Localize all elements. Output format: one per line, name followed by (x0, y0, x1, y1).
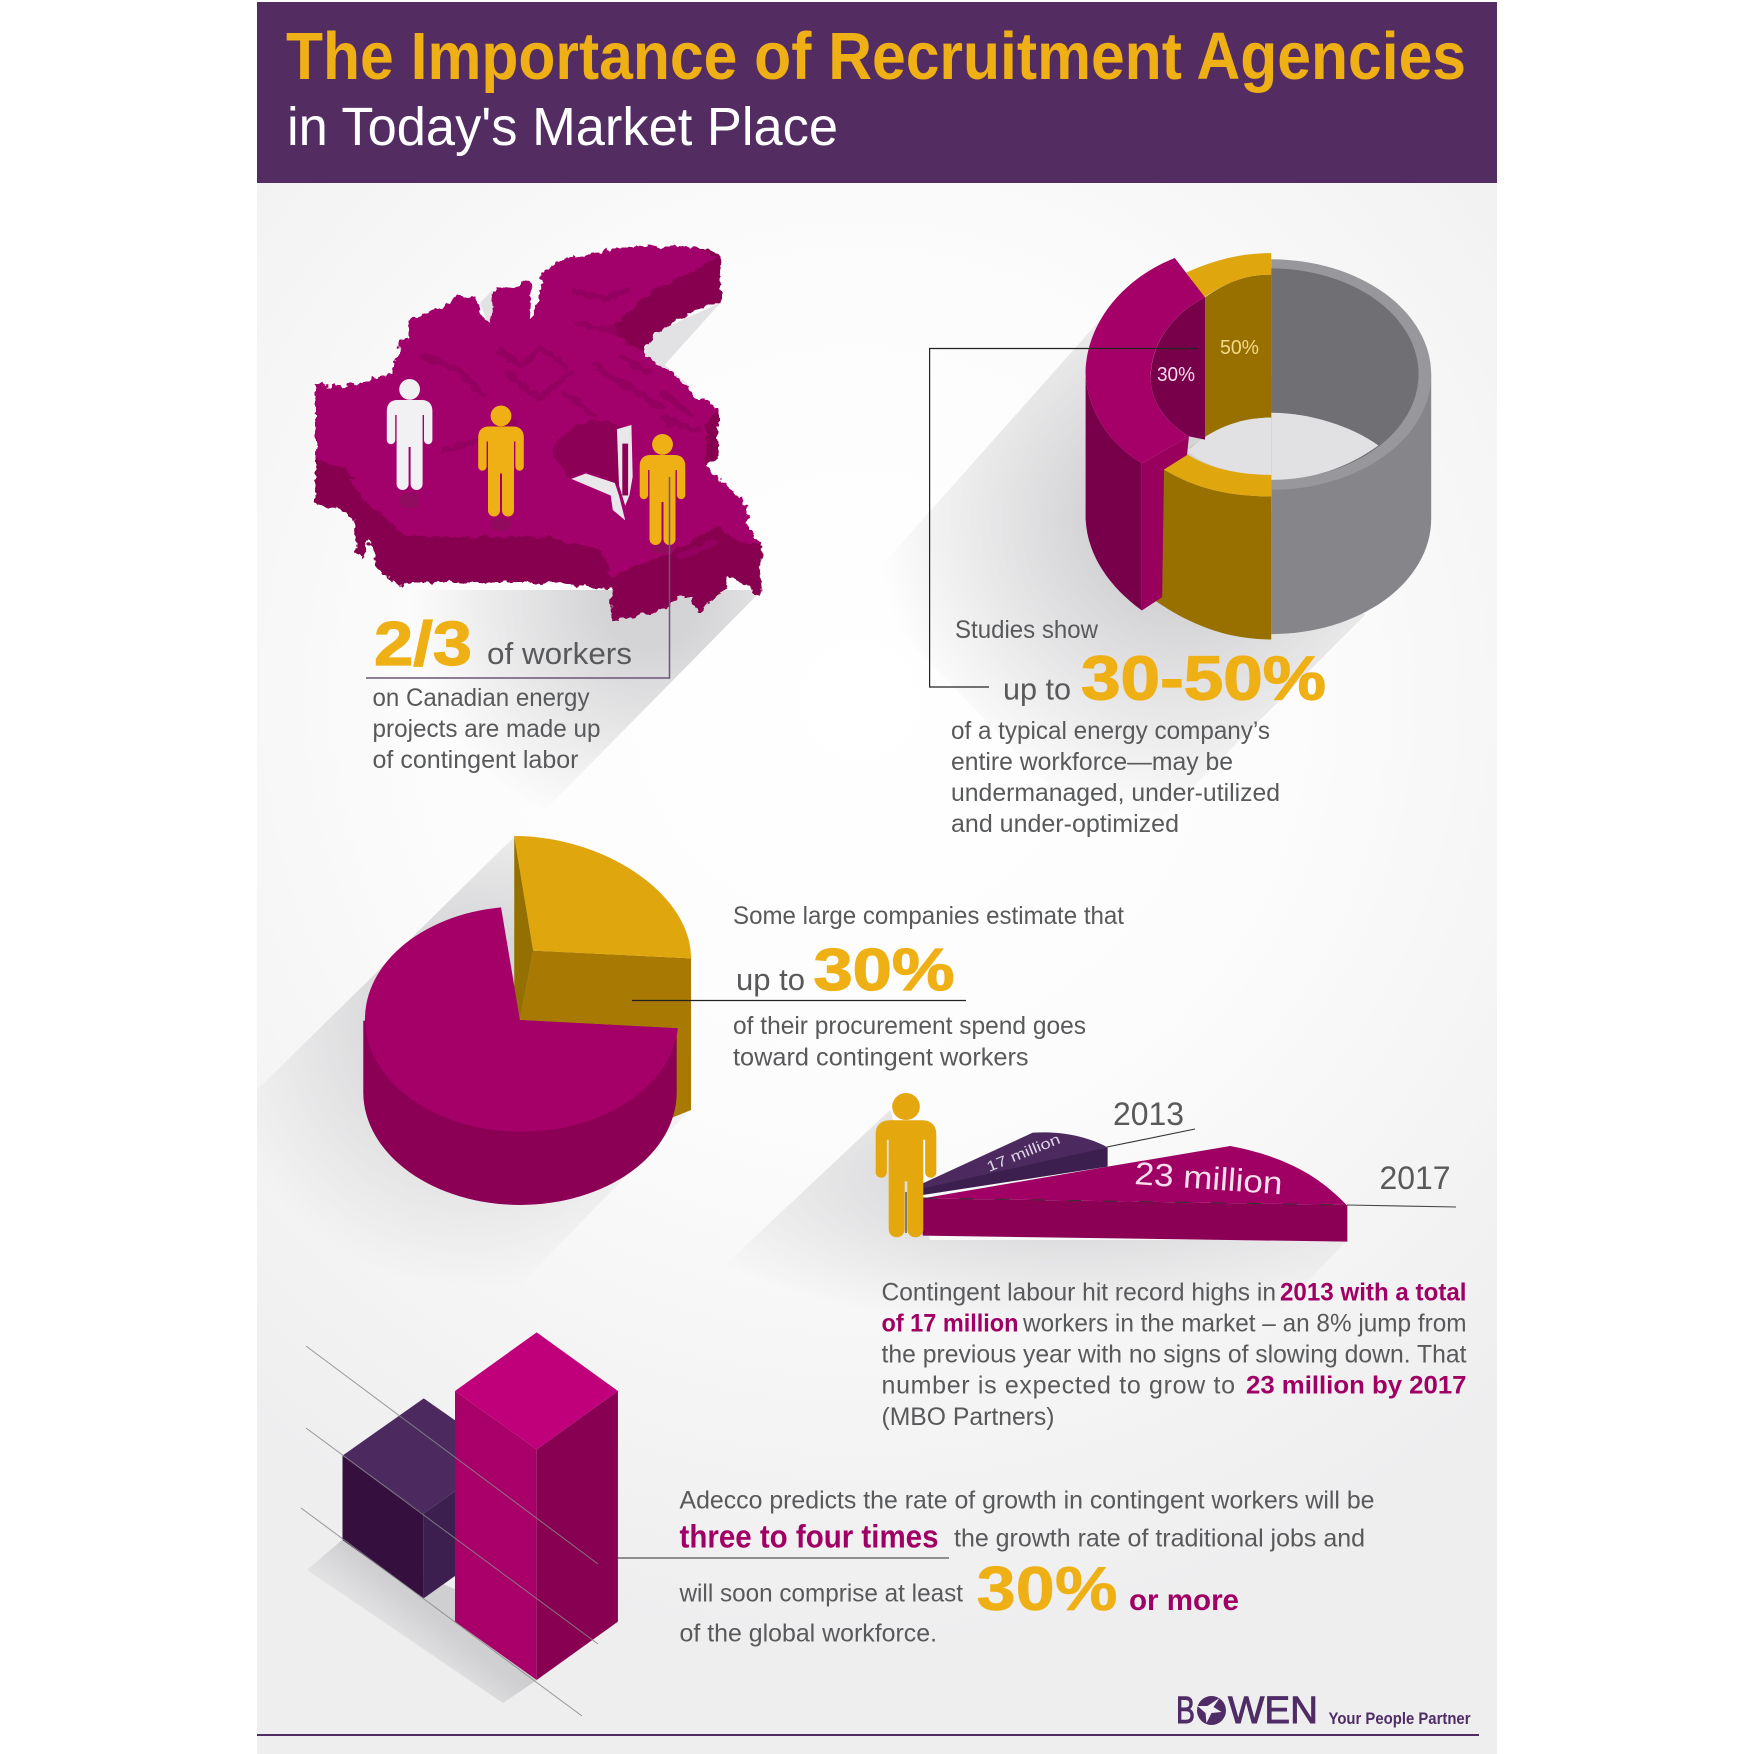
person: amber worker (876, 1093, 936, 1237)
text: Adecco prediction: will soon comprise at least (679, 1580, 963, 1608)
label 50%: 50% (1220, 337, 1259, 359)
stat: 30-50% (951, 616, 1326, 838)
2013 wedge (923, 1132, 1108, 1195)
logo: Bowen: WEN (1228, 1690, 1318, 1732)
text: contingent labour: of 17 million (882, 1310, 1018, 1338)
bar chart: isometric bars (301, 1332, 618, 1716)
person: white (387, 379, 432, 490)
text: Adecco prediction: the growth rate of traditional jobs and (954, 1524, 1365, 1552)
text: contingent labour: Contingent labour hit record highs in (882, 1278, 1276, 1306)
stat: 30-50%: of a typical energy company’s (951, 717, 1270, 745)
subtitle: in Today's Market Place (287, 97, 838, 157)
stat: 30-50%: 30-50% (1081, 644, 1326, 714)
stat: 30% procurement: Some large companies estimate that (733, 902, 1124, 930)
text: Adecco prediction: three to four times (680, 1518, 938, 1554)
2017 wedge (923, 1146, 1347, 1242)
panel: background (257, 150, 1497, 1754)
text: contingent labour: 2013 with a total (1280, 1278, 1466, 1306)
stat: 30-50%: and under-optimized (951, 810, 1179, 838)
label 2017: 2017 (1380, 1160, 1450, 1196)
label 17 million: 17 million (985, 1132, 1063, 1176)
map lakes and inlets (424, 290, 714, 556)
logo: Bowen: B (1176, 1690, 1195, 1732)
stat: 30-50%: up to (1003, 672, 1071, 706)
icon: globe letter O (1197, 1696, 1226, 1725)
stat: 30% procurement: toward contingent workers (733, 1044, 1029, 1072)
shadow: growth chart (725, 1110, 1347, 1330)
grey half ring (1271, 259, 1431, 634)
text: contingent labour: the previous year with no signs of slowing down. That (882, 1340, 1467, 1368)
connector: bars (618, 1557, 949, 1559)
shadow: ring chart (860, 320, 1365, 860)
text: contingent labour: workers in the market – an 8% jump from (1022, 1310, 1466, 1338)
small purple bar (342, 1398, 505, 1598)
header band (257, 2, 1497, 183)
amber 50% segment (1154, 253, 1271, 639)
stat: 30% procurement (733, 902, 1124, 1072)
pie chart (363, 836, 691, 1205)
logo: Bowen (1176, 1690, 1471, 1732)
shadow: bars (307, 1540, 537, 1703)
leader 2017 (1347, 1205, 1456, 1207)
leader 2013 (1107, 1129, 1195, 1147)
connector: map stat (366, 477, 670, 678)
text: Adecco prediction: 30% (976, 1555, 1118, 1624)
title: The Importance of Recruitment Agencies (286, 19, 1466, 94)
stat: 2/3 of workers (372, 610, 632, 774)
stat: 2/3 of workers: of contingent labor (372, 746, 578, 774)
Hudson Bay (551, 421, 625, 483)
map side faces (316, 247, 761, 622)
map of Canada with workers (316, 247, 761, 622)
stat: 30% procurement: 30% (814, 937, 954, 1003)
text: Adecco prediction: Adecco predicts the rate of growth in contingent workers will be (680, 1486, 1374, 1514)
stat: 2/3 of workers: of workers (487, 636, 632, 671)
stat: 30-50%: Studies show (955, 616, 1099, 644)
growth chart (876, 1093, 1456, 1242)
label 2013: 2013 (1113, 1096, 1184, 1132)
stat: 2/3 of workers: 2/3 (374, 610, 472, 679)
label 30%: 30% (1157, 364, 1195, 386)
connector: pie (632, 1000, 966, 1002)
connector: ring chart (930, 348, 1198, 687)
map top face (316, 247, 761, 576)
text: contingent labour: 23 million by 2017 (1246, 1372, 1466, 1400)
footer rule (257, 1734, 1479, 1736)
text: Adecco prediction: of the global workforce. (680, 1620, 937, 1648)
stat: 30-50%: entire workforce—may be (951, 748, 1233, 776)
text: Adecco prediction: or more (1129, 1584, 1239, 1617)
text: Adecco prediction (679, 1486, 1374, 1648)
ring chart (1086, 253, 1431, 639)
text: contingent labour: number is expected to grow to (882, 1372, 1235, 1400)
tall magenta bar (455, 1332, 618, 1680)
shadow: pie (257, 836, 692, 1285)
magenta slice (363, 907, 678, 1205)
amber slice (514, 836, 691, 1120)
text: contingent labour: (MBO Partners) (882, 1403, 1054, 1431)
text: contingent labour (882, 1278, 1467, 1431)
stat: 30-50%: undermanaged, under-utilized (951, 779, 1280, 807)
logo: Bowen: Your People Partner (1328, 1709, 1471, 1728)
stat: 2/3 of workers: on Canadian energy (372, 684, 590, 712)
stat: 2/3 of workers: projects are made up (372, 715, 600, 743)
shadow: map (370, 590, 762, 815)
person: amber 2 (640, 434, 685, 545)
label 23 million: 23 million (1134, 1155, 1284, 1201)
stat: 30% procurement: of their procurement spend goes (733, 1012, 1086, 1040)
magenta 30% segment (1086, 258, 1205, 610)
person: amber 1 (478, 406, 524, 516)
stat: 30% procurement: up to (736, 962, 805, 997)
